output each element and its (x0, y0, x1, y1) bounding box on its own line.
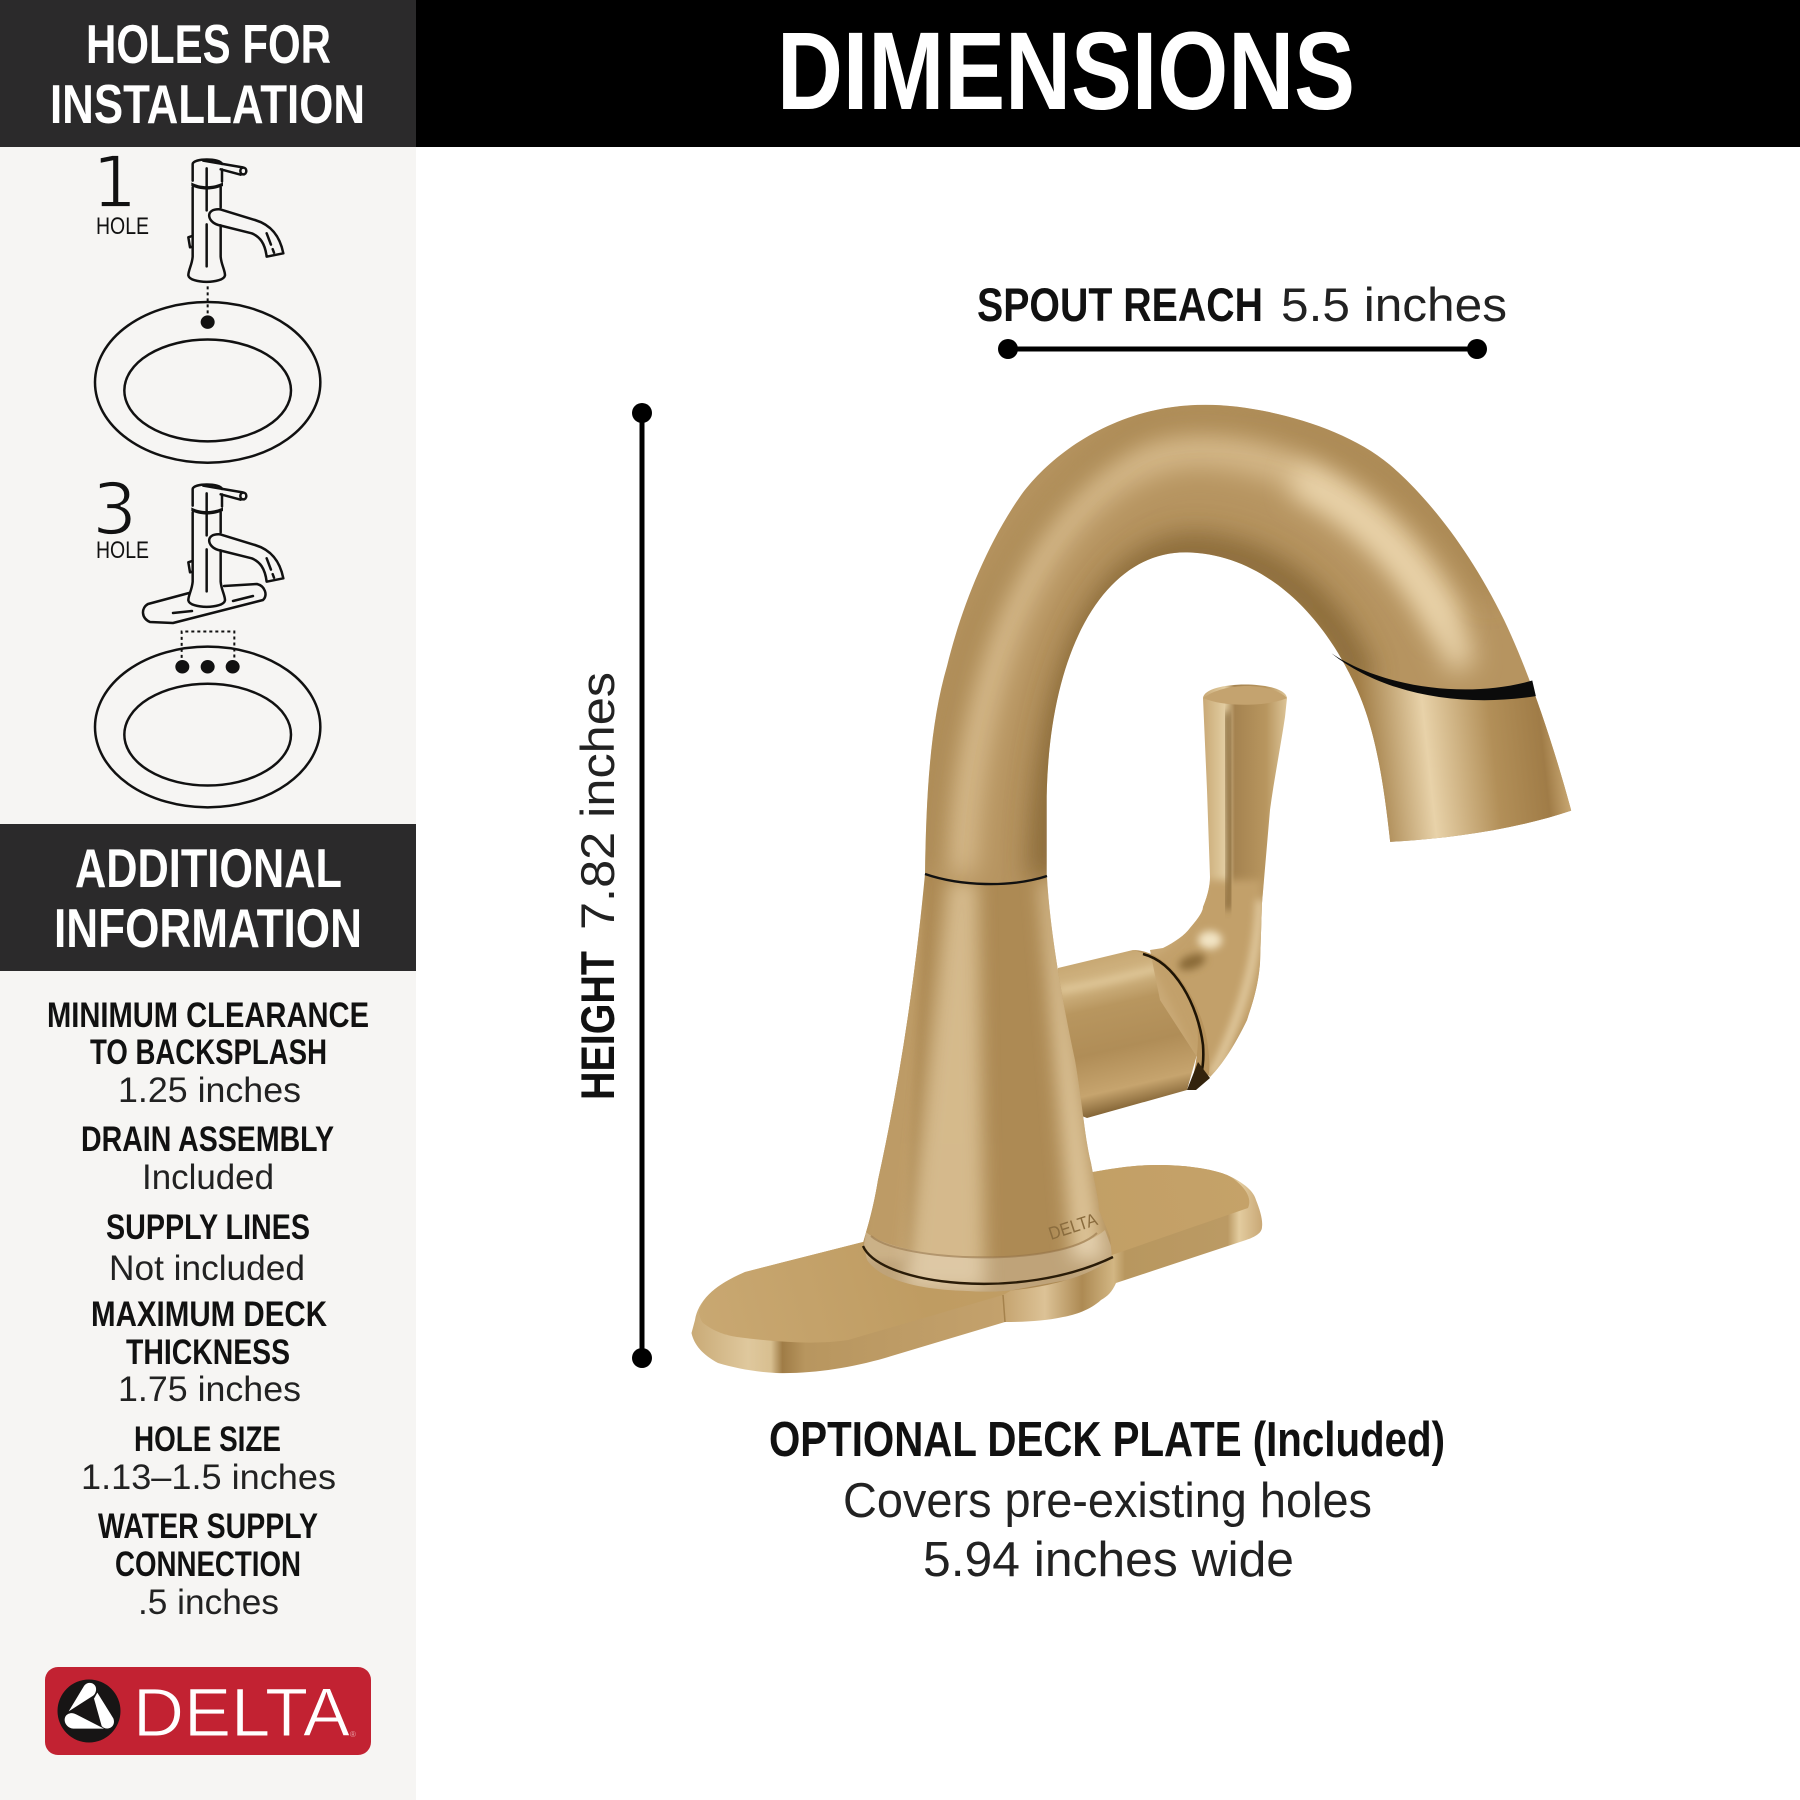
panel: left sidebar background (0, 0, 416, 1800)
title banner: dimensions: DIMENSIONS (777, 10, 1355, 133)
logo: Delta: ® (350, 1730, 356, 1739)
faucet brand mark: DELTA (1046, 1209, 1100, 1244)
text block: specifications list: THICKNESS (126, 1333, 290, 1372)
text block: specifications list: Not included (109, 1249, 305, 1288)
text block: specifications list: 1.25 inches (118, 1071, 301, 1110)
heading panel: holes for installation (0, 0, 416, 147)
neck joint (925, 874, 1047, 884)
logo: Delta: DELTA (133, 1674, 350, 1751)
heading panel: additional information (0, 824, 416, 971)
dimension: height: 7.82 inches (571, 672, 624, 930)
text block: specifications list: SUPPLY LINES (106, 1208, 310, 1247)
diagram: 3 hole installation: HOLE (96, 537, 149, 564)
logo: Delta (45, 1667, 371, 1755)
deck plate (692, 1165, 1262, 1373)
text block: specifications list: HOLE SIZE (134, 1420, 281, 1459)
text block: specifications list: DRAIN ASSEMBLY (81, 1120, 334, 1159)
diagram: 1 hole installation: 1 (92, 141, 137, 224)
faucet handle cylinder (1058, 950, 1196, 1118)
diagram: 3 hole installation: 3 (92, 468, 137, 551)
heading panel: additional information: INFORMATION (54, 897, 362, 959)
text block: specifications list: CONNECTION (115, 1545, 301, 1584)
text block: optional deck plate (769, 1413, 1445, 1587)
heading panel: holes for installation: INSTALLATION (50, 73, 365, 135)
text block: specifications list: .5 inches (138, 1583, 279, 1622)
dimension: height (571, 403, 652, 1368)
lever collar ring (1133, 950, 1210, 1090)
dimension: spout reach (977, 278, 1507, 359)
dimension: spout reach: 5.5 inches (1281, 278, 1507, 331)
faucet body (863, 874, 1112, 1292)
text block: optional deck plate: OPTIONAL DECK PLATE (Included) (769, 1413, 1445, 1467)
illustration: gold faucet (692, 380, 1600, 1373)
dimension: height: HEIGHT (571, 951, 624, 1100)
text block: specifications list: TO BACKSPLASH (90, 1033, 327, 1072)
spout arch and nozzle (925, 404, 1572, 883)
text block: specifications list: WATER SUPPLY (98, 1507, 318, 1546)
title banner: dimensions (416, 0, 1800, 147)
diagram: 1 hole installation: HOLE (96, 213, 149, 240)
faucet lever (1150, 684, 1287, 1077)
text block: specifications list: 1.13–1.5 inches (81, 1458, 336, 1497)
dimension: spout reach: SPOUT REACH (977, 278, 1263, 331)
body base outline (863, 1246, 1113, 1284)
text block: optional deck plate: Covers pre-existing holes (843, 1474, 1372, 1528)
text block: specifications list: Included (142, 1158, 274, 1197)
diagram: 1 hole installation (92, 141, 320, 463)
text block: specifications list: MINIMUM CLEARANCE (47, 996, 369, 1035)
diagram: 3 hole installation (92, 468, 320, 807)
text block: specifications list: 1.75 inches (118, 1370, 301, 1409)
heading panel: additional information: ADDITIONAL (75, 837, 342, 899)
text block: specifications list (47, 996, 369, 1622)
text block: specifications list: MAXIMUM DECK (91, 1295, 327, 1334)
text block: optional deck plate: 5.94 inches wide (923, 1533, 1294, 1587)
heading panel: holes for installation: HOLES FOR (86, 13, 331, 75)
